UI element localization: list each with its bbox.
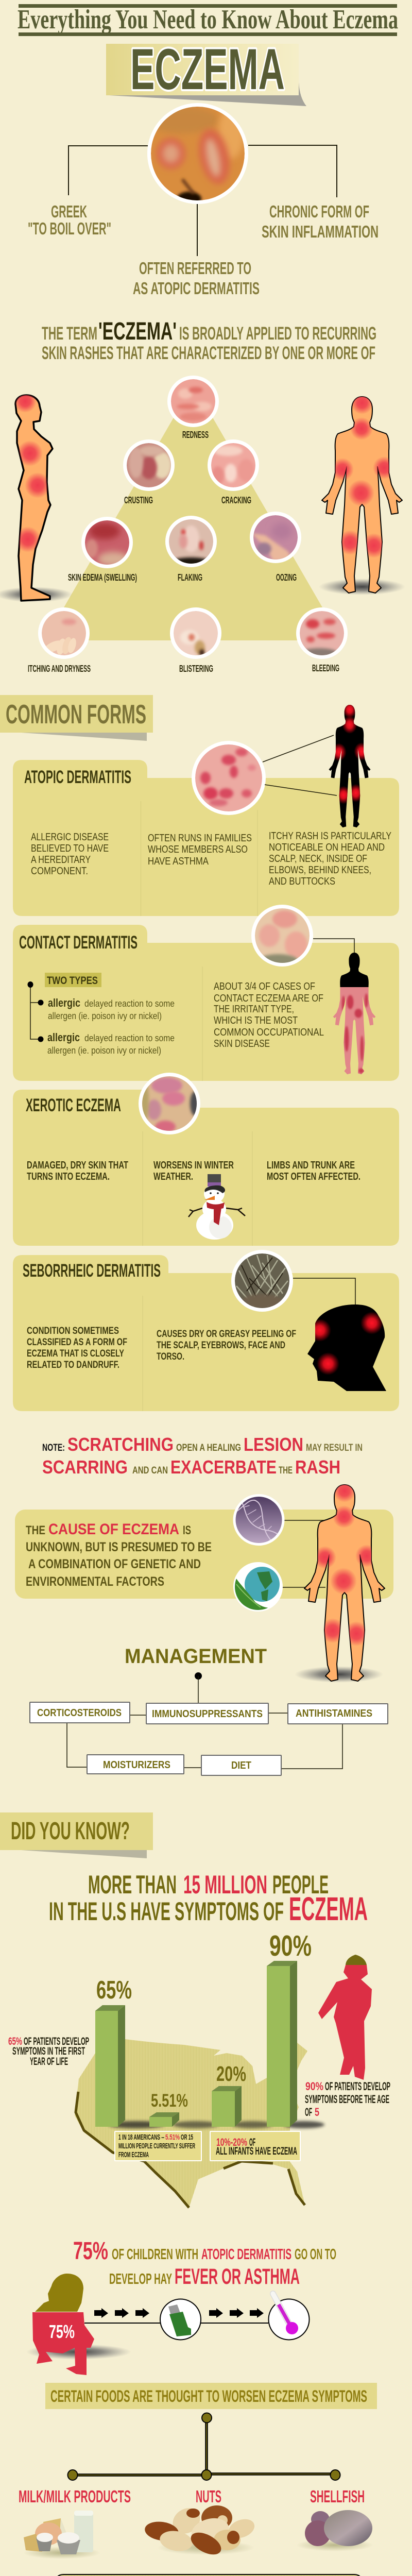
callout: 1 in 18: 1 IN 18 AMERICANS -- <box>118 2133 164 2142</box>
management flow: DIET <box>231 1760 251 1771</box>
stat text: 90 percent: OF <box>305 2106 312 2119</box>
text: irritant type: THE IRRITANT TYPE, <box>214 1004 294 1015</box>
symptom labels: BLISTERING <box>179 664 213 674</box>
text: allergic disease <box>31 831 391 887</box>
timeline line <box>84 2323 268 2324</box>
text: allergic disease: BELIEVED TO HAVE <box>31 843 109 854</box>
text: seborrheic facts: TORSO. <box>157 1351 184 1362</box>
headline: 15 million: 15 MILLION <box>183 1870 267 1899</box>
management flow: MOISTURIZERS <box>103 1759 170 1771</box>
icon: inhaler <box>160 2299 201 2340</box>
note about scratching: THE <box>279 1465 293 1476</box>
text: allergic disease: NOTICEABLE ON HEAD AND <box>269 842 385 853</box>
two types diagram: allergen (ie. poison ivy or nickel) <box>47 1045 161 1056</box>
two types diagram: TWO TYPES <box>47 975 98 987</box>
two types diagram: allergen (ie. poison ivy or nickel) <box>48 1011 162 1021</box>
text: cause <box>26 1521 212 1589</box>
heading: contact dermatitis: CONTACT DERMATITIS <box>19 933 138 953</box>
symptom: flaking <box>165 516 217 569</box>
intro sentence: THE TERM <box>42 324 97 344</box>
symptom labels: CRUSTING <box>124 495 153 505</box>
two types diagram: allergic <box>48 996 80 1009</box>
food labels: NUTS <box>196 2487 221 2506</box>
icon: child silhouette <box>318 1955 372 2080</box>
definitions: AS ATOPIC DERMATITIS <box>133 279 260 298</box>
headline: 75 percent: ATOPIC DERMATITIS <box>201 2246 291 2263</box>
symptom: skin edema <box>81 517 133 568</box>
note about scratching: SCARRING <box>42 1456 128 1478</box>
banner: eczema <box>106 37 306 106</box>
symptom labels: REDNESS <box>182 430 209 440</box>
definitions <box>28 202 379 298</box>
text: allergic disease: WHOSE MEMBERS ALSO <box>148 844 248 855</box>
chart: 3d bars <box>95 1929 324 2128</box>
connector lines <box>68 145 337 256</box>
banner: foods <box>45 2383 377 2409</box>
note about scratching: MAY RESULT IN <box>306 1443 363 1453</box>
food labels <box>19 2487 365 2506</box>
icon: thermometer <box>269 2294 309 2340</box>
note about scratching: EXACERBATE <box>170 1456 277 1478</box>
text: allergic disease: SCALP, NECK, INSIDE OF <box>269 853 367 865</box>
closing callout <box>54 2574 364 2576</box>
text: xerotic facts: MOST OFTEN AFFECTED. <box>267 1171 360 1182</box>
banner: did you know <box>0 1812 153 1858</box>
text: irritant type <box>214 981 324 1049</box>
note about scratching: SCRATCHING <box>67 1434 174 1455</box>
symptom labels: ITCHING AND DRYNESS <box>28 664 91 674</box>
definitions: OFTEN REFERRED TO <box>139 259 251 278</box>
symptom labels: OOZING <box>276 572 297 583</box>
heading: xerotic eczema: XEROTIC ECZEMA <box>26 1095 121 1115</box>
icon: earth and leaf <box>233 1562 283 1613</box>
intro sentence <box>42 318 376 363</box>
text: seborrheic facts: RELATED TO DANDRUFF. <box>27 1360 119 1370</box>
panel: atopic dermatitis <box>13 701 399 916</box>
icon: dna <box>233 1494 284 1546</box>
text: seborrheic facts: CLASSIFIED AS A FORM OF <box>27 1337 127 1348</box>
figure: man with cause lines <box>295 1480 385 1683</box>
callout: infants <box>210 2131 300 2161</box>
text: seborrheic facts: CAUSES DRY OR GREASY PEELING OF <box>157 1329 296 1340</box>
two types diagram <box>28 973 175 1056</box>
text: cause: IS <box>183 1523 191 1537</box>
text: allergic disease: AND BUTTOCKS <box>269 876 335 887</box>
bar 5.51% <box>149 2112 179 2127</box>
heading: atopic dermatitis: ATOPIC DERMATITIS <box>24 767 131 787</box>
symptom: blistering <box>170 607 221 659</box>
text: xerotic facts: LIMBS AND TRUNK ARE <box>267 1160 355 1171</box>
text: xerotic facts <box>27 1160 360 1182</box>
figure: half black half rash <box>333 953 375 1074</box>
chart: 3d bars: 20% <box>216 2062 246 2086</box>
food labels: SHELLFISH <box>310 2487 365 2506</box>
callout: infants: ALL INFANTS HAVE ECZEMA <box>216 2145 297 2157</box>
bar 20% <box>212 2086 242 2127</box>
note about scratching: NOTE: <box>42 1443 65 1453</box>
note about scratching: LESION <box>244 1434 303 1455</box>
text: allergic disease: ALLERGIC DISEASE <box>31 832 109 843</box>
icon: shellfish <box>296 2510 373 2551</box>
text: allergic disease: A HEREDITARY <box>31 854 91 866</box>
bar 90% <box>267 1961 297 2127</box>
headline: 75 percent: FEVER OR ASTHMA <box>175 2264 300 2289</box>
text: seborrheic facts: CONDITION SOMETIMES <box>27 1326 119 1336</box>
heading: management: MANAGEMENT <box>125 1645 267 1668</box>
symptom labels: BLEEDING <box>312 663 339 673</box>
food tree connector <box>68 2413 340 2480</box>
headline: 15 million: PEOPLE <box>272 1870 329 1899</box>
chart: 3d bars: 90% <box>269 1929 312 1962</box>
text: irritant type: SKIN DISEASE <box>214 1038 270 1049</box>
bar 65% <box>95 2005 125 2127</box>
icon: baby <box>26 2274 131 2375</box>
symptom: itching and dryness <box>38 607 90 659</box>
headline: 75 percent: DEVELOP HAY <box>109 2271 172 2287</box>
text: irritant type: COMMON OCCUPATIONAL <box>214 1027 324 1038</box>
text: irritant type: ABOUT 3/4 OF CASES OF <box>214 981 315 992</box>
text: irritant type: CONTACT ECZEMA ARE OF <box>214 993 323 1004</box>
symptom: oozing <box>250 512 301 563</box>
icon: baby: 75% <box>49 2321 75 2342</box>
two types diagram: allergic <box>47 1031 80 1044</box>
photo: contact rash <box>251 905 313 969</box>
note about scratching: OPEN A HEALING <box>176 1443 241 1453</box>
text: xerotic facts: DAMAGED, DRY SKIN THAT <box>27 1160 128 1171</box>
callout: infants: 10%-20% <box>216 2137 247 2148</box>
photo: eczema rash <box>146 103 248 206</box>
symptom labels: FLAKING <box>178 572 202 583</box>
photo: scalp <box>231 1250 293 1312</box>
intro sentence: 'ECZEMA' <box>98 318 177 345</box>
text: cause: A COMBINATION OF GENETIC AND <box>28 1557 201 1571</box>
headline: 75 percent: GO ON TO <box>295 2246 336 2263</box>
photo: atopic rash <box>192 741 266 815</box>
text: cause: UNKNOWN, BUT IS PRESUMED TO BE <box>26 1540 212 1554</box>
panel: cause of eczema <box>15 1494 393 1613</box>
text: irritant type: WHICH IS THE MOST <box>214 1015 298 1026</box>
text: allergic disease: HAVE ASTHMA <box>148 856 209 867</box>
arrows <box>94 2308 264 2318</box>
stat text: 65 percent: YEAR OF LIFE <box>30 2056 68 2067</box>
callout: 1 in 18: FROM ECZEMA <box>118 2150 149 2159</box>
stat text: 65 percent: OF PATIENTS DEVELOP <box>24 2036 89 2047</box>
figure: man front <box>319 392 405 595</box>
two types diagram: delayed reaction to some <box>84 998 175 1009</box>
management flow: IMMUNOSUPPRESSANTS <box>152 1708 263 1720</box>
symptom: bleeding <box>296 607 348 659</box>
management flow <box>30 1672 388 1775</box>
headline: 75 percent: OF CHILDREN WITH <box>112 2246 198 2263</box>
text: xerotic facts: WORSENS IN WINTER <box>153 1160 234 1171</box>
map: united states <box>75 2039 307 2208</box>
icon: milk products <box>23 2511 100 2559</box>
callout: 1 in 18: 5.51% <box>165 2133 180 2142</box>
definitions: "TO BOIL OVER" <box>28 219 111 238</box>
definitions: GREEK <box>51 202 87 221</box>
text: cause: ENVIRONMENTAL FACTORS <box>26 1574 164 1589</box>
text: allergic disease: ELBOWS, BEHIND KNEES, <box>269 865 371 876</box>
headline: 75 percent: 75% <box>73 2238 108 2265</box>
symptom: cracking <box>208 439 259 491</box>
icon: snowman <box>188 1174 245 1240</box>
symptom labels <box>28 430 339 674</box>
headline: 75 percent <box>73 2238 336 2289</box>
callout: 1 in 18: MILLION PEOPLE CURRENTLY SUFFER <box>118 2142 195 2150</box>
symptom labels: SKIN EDEMA (SWELLING) <box>68 572 137 583</box>
callout: 1 in 18: OR 15 <box>181 2133 193 2142</box>
stat text: 90 percent: 5 <box>315 2106 319 2119</box>
text: seborrheic facts: ECZEMA THAT IS CLOSELY <box>27 1348 124 1359</box>
text: allergic disease: OFTEN RUNS IN FAMILIES <box>148 833 252 844</box>
banner: common forms: COMMON FORMS <box>6 700 146 730</box>
banner: did you know: DID YOU KNOW? <box>11 1818 130 1845</box>
chart: 3d bars: 5.51% <box>151 2091 188 2111</box>
stat text: 65 percent <box>8 2036 89 2067</box>
callout: infants: OF <box>249 2137 255 2148</box>
note about scratching: RASH <box>295 1456 340 1478</box>
symptom: crusting <box>123 439 175 491</box>
food labels: MILK/MILK PRODUCTS <box>19 2487 131 2506</box>
callout: 1 in 18 <box>115 2131 201 2161</box>
stat text: 65 percent: 65% <box>8 2036 22 2047</box>
text: seborrheic facts: THE SCALP, EYEBROWS, FACE AND <box>157 1340 285 1351</box>
stat text: 90 percent: 90% <box>305 2080 323 2093</box>
symptom: redness <box>167 376 219 427</box>
management flow: CORTICOSTEROIDS <box>37 1707 122 1719</box>
icon: head silhouette with spots <box>307 1304 386 1391</box>
text: cause: THE <box>26 1523 45 1537</box>
panel: contact dermatitis <box>13 905 399 1081</box>
stat text: 65 percent: SYMPTOMS IN THE FIRST <box>12 2045 85 2057</box>
text: cause: CAUSE OF ECZEMA <box>48 1521 179 1538</box>
banner: common forms <box>0 695 153 741</box>
figure: black silhouette with red spots <box>329 701 371 827</box>
pyramid <box>45 384 341 640</box>
text: seborrheic facts <box>27 1326 296 1370</box>
headline: 15 million: MORE THAN <box>88 1870 177 1899</box>
stat text: 90 percent <box>305 2080 390 2119</box>
note about scratching: AND CAN <box>132 1465 168 1476</box>
panel: xerotic eczema <box>13 1073 399 1246</box>
two types diagram: delayed reaction to some <box>84 1033 175 1043</box>
photo: xerotic rash <box>139 1073 200 1134</box>
note about scratching <box>42 1434 363 1478</box>
figure: woman side <box>0 390 73 602</box>
banner: eczema: ECZEMA <box>130 37 285 101</box>
panel: seborrheic dermatitis <box>13 1250 399 1411</box>
management flow: ANTIHISTAMINES <box>296 1708 372 1719</box>
headline: 15 million <box>49 1870 368 1927</box>
icon: nuts <box>144 2503 257 2559</box>
text: allergic disease: COMPONENT. <box>31 866 88 877</box>
heading: seborrheic dermatitis: SEBORRHEIC DERMATITIS <box>23 1261 161 1281</box>
chart: 3d bars: 65% <box>96 1976 132 2004</box>
symptom labels: CRACKING <box>221 495 251 505</box>
text: xerotic facts: TURNS INTO ECZEMA. <box>27 1171 110 1182</box>
text: xerotic facts: WEATHER. <box>153 1171 193 1182</box>
